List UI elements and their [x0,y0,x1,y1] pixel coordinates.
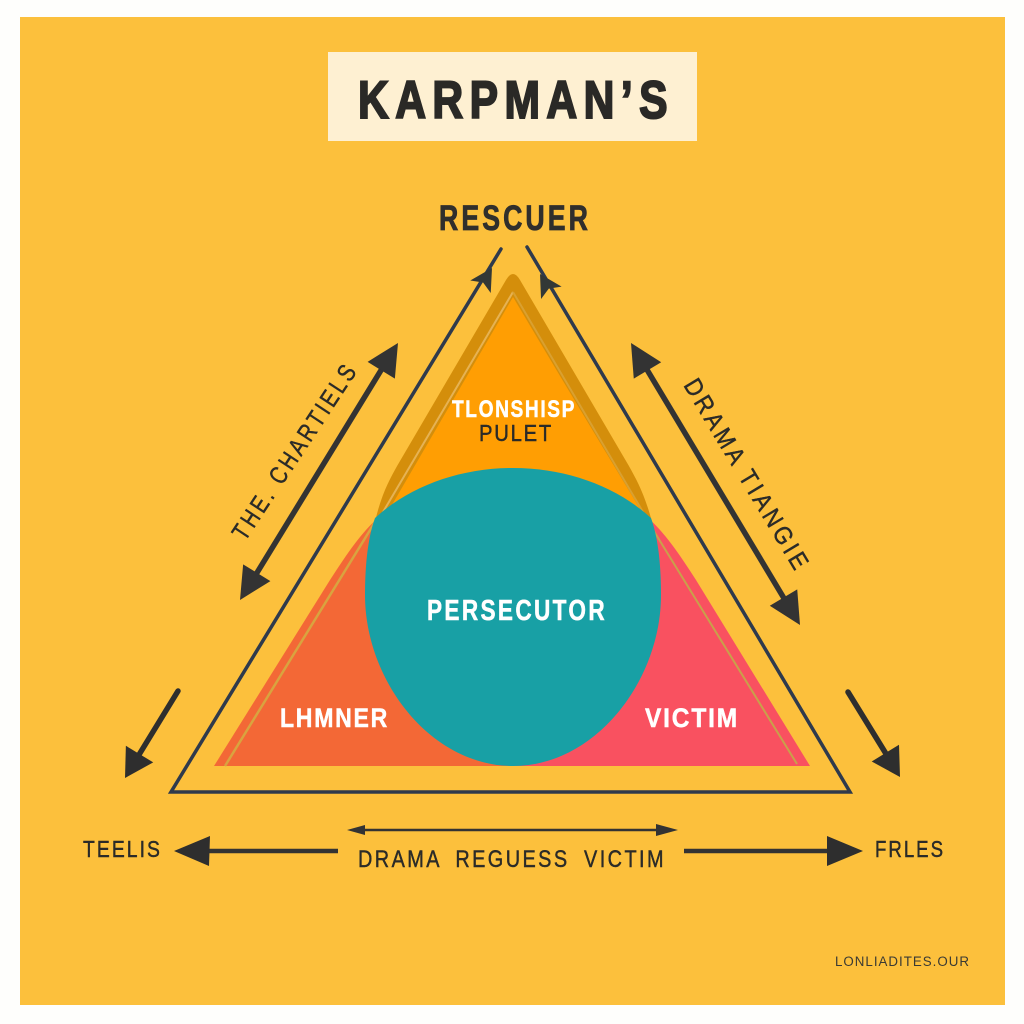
label: right side: DRAMA TIANGIE [678,374,816,578]
arrow: bottom left [174,836,338,866]
segment label: TLONSHISP [452,396,576,423]
arrow: lower left small [111,691,178,786]
arrow: right double-headed [617,335,814,633]
panel: rescuer segment [375,274,652,522]
label: frles: FRLES [875,836,945,862]
label: left side: THE. CHARTIELS [227,357,364,545]
panel: lower left segment [214,518,520,766]
arrow: bottom right [684,836,863,866]
arrow: lower right small [848,692,914,785]
segment sublabel: PULET [479,420,553,446]
segment label: VICTIM [645,703,739,733]
label: bottom caption: DRAMA REGUESS VICTIM [358,846,666,873]
panel: victim segment [510,518,810,766]
title box [328,52,697,141]
panel: persecutor circle [365,468,661,766]
circle label: PERSECUTOR [427,595,607,627]
label: teelis: TEELIS [83,836,162,862]
footer url: LONLIADITES.OUR [835,954,970,969]
outer triangle outline with arrowheads [171,247,850,792]
heading: rescuer: RESCUER [439,199,591,238]
title box: KARPMAN’S [358,71,674,130]
arrow: left double-headed [226,335,412,608]
segment label: LHMNER [280,703,389,733]
arrow: thin top double-headed [347,824,678,836]
